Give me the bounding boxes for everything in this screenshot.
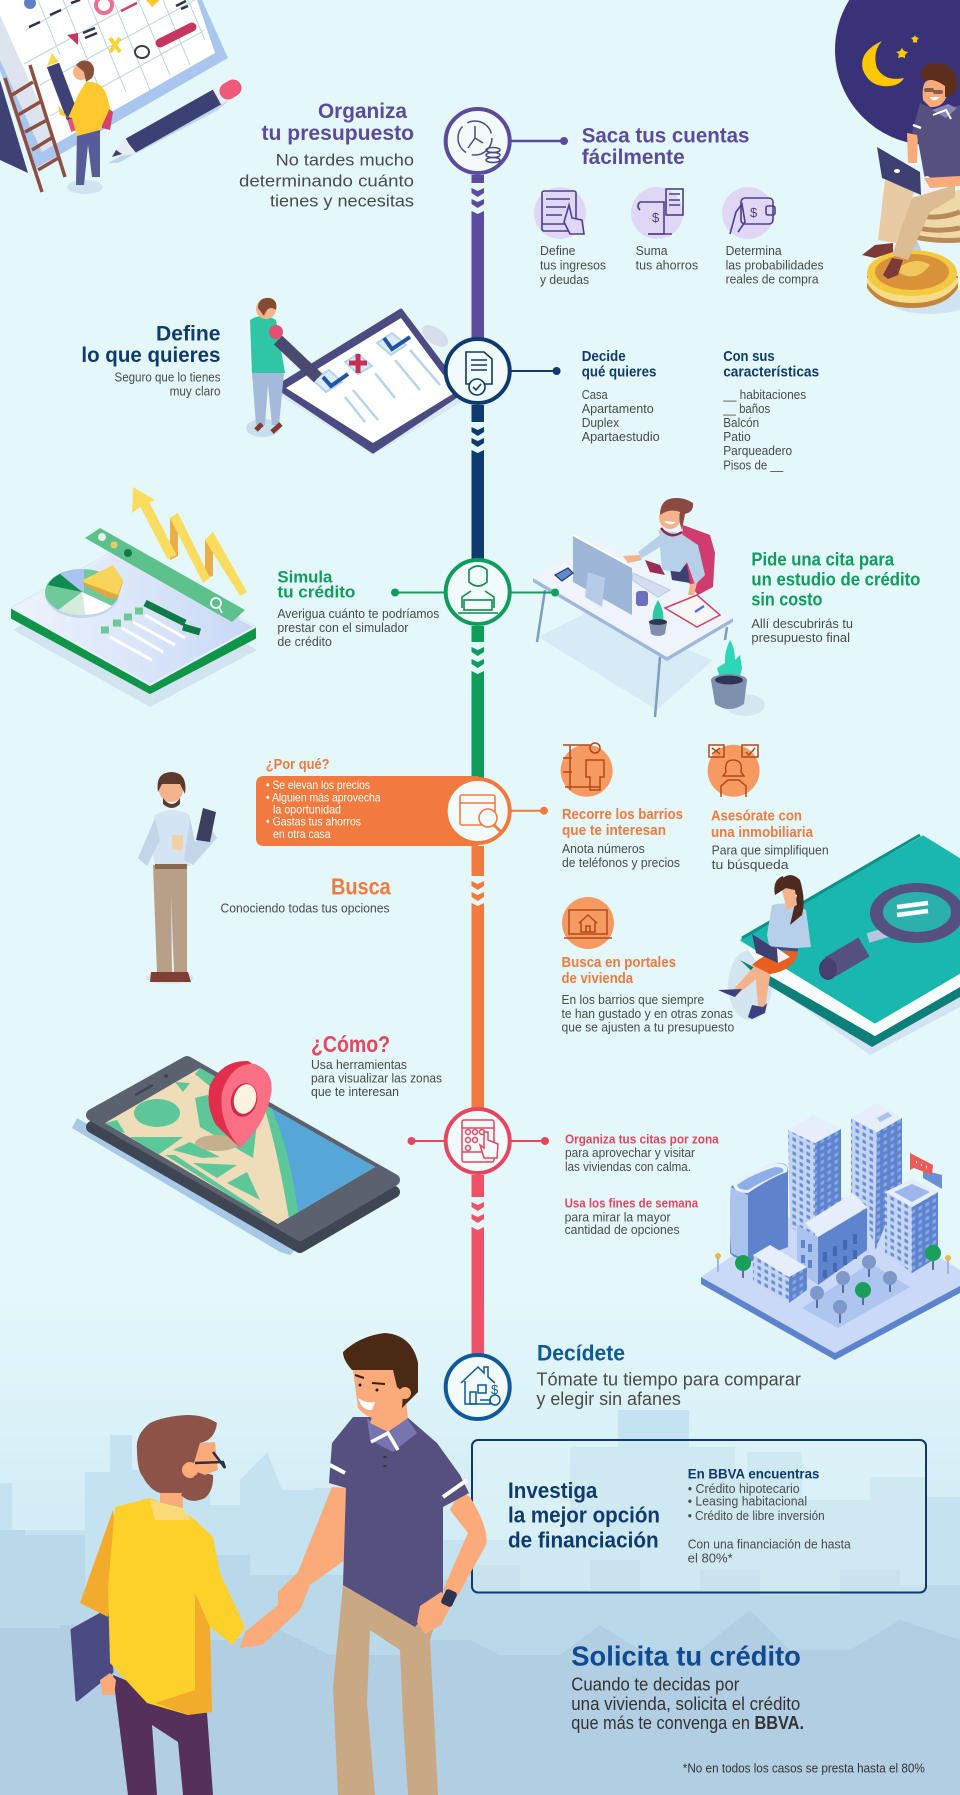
text: organiza tus citas — [565, 1131, 719, 1174]
text: en bbva encuentras: • Crédito hipotecario — [688, 1481, 800, 1496]
heading: decídete: Decídete — [537, 1341, 625, 1366]
text: determina las probabilidades: las probabilidades — [726, 258, 824, 272]
chair — [645, 525, 715, 595]
tall man — [240, 1333, 487, 1795]
text: no tardes mucho: determinando cuánto — [239, 172, 414, 191]
building: round tower — [730, 1163, 788, 1262]
icon: portal de vivienda — [562, 897, 614, 949]
text: para que simplifiquen: Para que simplifiquen — [712, 843, 829, 858]
text: anota números — [562, 841, 680, 870]
heading: decide qué quieres: qué quieres — [582, 364, 656, 381]
heading: recorre los barrios — [562, 806, 683, 839]
building: tower b — [788, 1115, 841, 1240]
icon: inmobiliaria — [708, 745, 760, 797]
heading: pide una cita: Pide una cita para — [751, 549, 895, 569]
text: usa herramientas — [311, 1057, 442, 1099]
text: en los barrios — [562, 992, 734, 1035]
step 1 node: organiza — [446, 109, 568, 173]
heading: organiza tu presupuesto: Organiza — [318, 99, 408, 123]
icon: phone calendar with hand — [462, 1120, 498, 1162]
trees and lamps — [715, 1245, 951, 1323]
illustration: phone with map and pin — [72, 1060, 394, 1255]
heading: organiza tu presupuesto — [262, 99, 414, 145]
cup and small plant — [636, 591, 667, 636]
panel: por qué — [256, 776, 478, 846]
panel: por qué: • Gastas tus ahorros — [266, 815, 361, 829]
building: church — [797, 1193, 867, 1285]
list: características: Pisos de __ — [723, 458, 784, 473]
heading: pide una cita: sin costo — [751, 589, 822, 609]
illustration: credit simulator chart — [12, 487, 257, 707]
heading: simula tu crédito: tu crédito — [277, 582, 355, 602]
heading: busca: Busca — [331, 874, 391, 900]
heading: asesórate — [711, 808, 814, 841]
heading: investiga — [508, 1478, 660, 1553]
list: tipos de vivienda — [582, 387, 660, 444]
heading: define lo que quieres: lo que quieres — [81, 343, 220, 367]
icon: clock and coins — [458, 121, 500, 162]
text: no tardes mucho — [239, 151, 414, 211]
heading: solicita tu crédito: Solicita tu crédito — [571, 1641, 801, 1672]
list: características: __ habitaciones — [722, 387, 807, 402]
text: anota números: de teléfonos y precios — [562, 855, 680, 870]
panel: por qué: la oportunidad — [273, 803, 341, 817]
icon: adviser at desk — [458, 566, 498, 613]
icon: recorre los barrios — [561, 743, 613, 797]
heading: organiza tu presupuesto: tu presupuesto — [262, 121, 414, 145]
potted plant — [711, 640, 765, 716]
step 3 node: simula — [391, 560, 555, 624]
text: determina las probabilidades: Determina — [726, 243, 782, 258]
list: tipos de vivienda: Apartamento — [582, 401, 654, 416]
text: en los barrios: te han gustado y en otras zonas — [562, 1006, 733, 1021]
text: usa los fines de semana: Usa los fines de semana — [565, 1195, 699, 1210]
text: tómate tu tiempo: Tómate tu tiempo para comparar — [536, 1370, 801, 1390]
table rows — [101, 603, 200, 660]
heading: simula tu crédito — [277, 568, 355, 602]
icon: document with check — [466, 352, 492, 395]
heading: busca en portales: de vivienda — [562, 970, 634, 987]
text: determina las probabilidades: reales de compra — [726, 272, 819, 286]
text: cuando te decidas: una vivienda, solicita el crédito — [571, 1694, 800, 1714]
text: por qué: ¿Por qué? — [266, 757, 330, 773]
text: para que simplifiquen — [712, 843, 829, 872]
text: organiza tus citas: las viviendas con calma. — [565, 1159, 691, 1174]
text: seguro que lo tienes: Seguro que lo tienes — [114, 370, 221, 385]
text: allí descubrirás — [751, 616, 853, 645]
text: organiza tus citas: Organiza tus citas por zona — [565, 1131, 719, 1146]
step 4 node: busca — [446, 779, 548, 843]
illustration: man with laptop on coins — [835, 0, 960, 314]
building: tower c — [851, 1103, 902, 1250]
woman — [623, 498, 705, 595]
text: en bbva encuentras: En BBVA encuentras — [688, 1465, 820, 1481]
person with pen — [246, 298, 318, 437]
text: seguro que lo tienes — [114, 370, 221, 399]
heading: busca en portales: Busca en portales — [562, 954, 676, 971]
pie chart — [45, 565, 123, 618]
text: usa los fines de semana — [565, 1195, 699, 1237]
list: características: Patio — [723, 429, 751, 444]
heading: decide qué quieres: Decide — [582, 348, 626, 365]
panel: por qué: • Se elevan los precios — [266, 778, 370, 792]
step 2 node: define — [446, 339, 561, 403]
heading: asesórate: una inmobiliaria — [711, 824, 814, 841]
coin stack — [867, 190, 960, 314]
text: no tardes mucho: tienes y necesitas — [270, 192, 414, 211]
notebook — [665, 595, 720, 627]
man — [862, 63, 960, 279]
text: en bbva encuentras: el 80%* — [688, 1550, 733, 1565]
illustration: woman at desk — [511, 498, 765, 717]
icon: house with keys: $ — [491, 1382, 499, 1397]
heading: recorre los barrios: Recorre los barrios — [562, 806, 683, 823]
arrow zigzag — [132, 487, 247, 596]
text: allí descubrirás: presupuesto final — [751, 630, 850, 645]
text: cuando te decidas — [571, 1675, 804, 1733]
text: determina las probabilidades — [726, 243, 824, 286]
list: tipos de vivienda: Duplex — [582, 415, 620, 430]
woman — [718, 875, 811, 1019]
panel: por qué: en otra casa — [273, 827, 331, 841]
panel: investiga — [472, 1440, 926, 1592]
text: define tus ingresos — [540, 243, 606, 287]
heading: define lo que quieres — [81, 322, 221, 367]
text: conociendo todas: Conociendo todas tus opciones — [220, 900, 390, 916]
monitor — [573, 535, 632, 615]
text: para que simplifiquen: tu búsqueda — [712, 857, 789, 872]
toolbar — [100, 540, 240, 622]
magnifier — [819, 883, 960, 980]
text: anota números: Anota números — [562, 841, 645, 856]
heading: con sus características: características — [723, 364, 819, 381]
pencil — [108, 88, 235, 163]
text: en bbva encuentras: • Leasing habitacional — [688, 1494, 807, 1509]
step 6 node: decídete — [446, 1355, 510, 1419]
icon: receipt and calculator — [638, 189, 683, 234]
list: tipos de vivienda: Casa — [582, 387, 608, 402]
phone — [555, 568, 573, 581]
step 5 node: cómo — [408, 1109, 549, 1173]
text: en bbva encuentras: Con una financiación de hasta — [688, 1537, 851, 1552]
text: organiza tus citas: para aprovechar y visitar — [565, 1145, 696, 1160]
desk top — [533, 539, 733, 661]
text: define tus ingresos: Define — [540, 243, 576, 258]
text: averigua — [277, 606, 440, 649]
text: averigua: Averigua cuánto te podríamos — [277, 606, 440, 621]
footnote: *No en todos los casos se presta hasta el 80% — [683, 1761, 925, 1776]
icon: income list — [542, 191, 584, 234]
text: usa herramientas: para visualizar las zonas — [311, 1070, 442, 1085]
text: define tus ingresos: y deudas — [540, 272, 589, 287]
desk legs — [537, 590, 727, 717]
heading: saca tus cuentas: fácilmente — [582, 145, 685, 169]
list: tipos de vivienda: Apartaestudio — [582, 429, 660, 444]
heading: define lo que quieres: Define — [156, 322, 221, 346]
illustration: handshake between two men — [72, 1333, 487, 1795]
illustration: man with phone and coffee — [138, 772, 217, 984]
icons: budget steps — [534, 187, 775, 239]
list: características: Parqueadero — [723, 443, 792, 458]
text: usa los fines de semana: cantidad de opciones — [565, 1222, 680, 1237]
text: define tus ingresos: tus ingresos — [540, 258, 606, 272]
list: características — [722, 387, 807, 473]
ladder — [5, 65, 65, 192]
illustration: calendar with person — [0, 0, 235, 194]
heading: recorre los barrios: que te interesan — [562, 822, 666, 839]
timeline — [472, 175, 484, 1356]
heading: investiga: la mejor opción — [508, 1502, 660, 1527]
text: usa herramientas: Usa herramientas — [311, 1057, 407, 1072]
heading: decide qué quieres — [582, 348, 656, 381]
text: cuando te decidas: que más te convenga en BBVA. — [571, 1713, 804, 1733]
text: allí descubrirás: Allí descubrirás tu — [751, 616, 853, 631]
icon: wallet and hand: $ — [750, 205, 758, 220]
heading: saca tus cuentas: Saca tus cuentas — [582, 124, 750, 148]
icon: wallet and hand — [730, 198, 775, 234]
text: en bbva encuentras: • Crédito de libre inversión — [688, 1508, 825, 1523]
map pin — [195, 1061, 272, 1151]
text: en los barrios: En los barrios que siempre — [562, 992, 704, 1007]
keyboard — [632, 573, 670, 597]
text: usa los fines de semana: para mirar la mayor — [565, 1209, 671, 1224]
building: small block — [753, 1245, 807, 1303]
heading: asesórate: Asesórate con — [711, 808, 802, 825]
heading: investiga: de financiación — [508, 1528, 659, 1553]
text: seguro que lo tienes: muy claro — [170, 384, 221, 399]
bearded man — [72, 1415, 245, 1795]
list: características: __ baños — [722, 401, 771, 416]
illustration: woman on tablet with magnifier — [718, 835, 960, 1055]
text: usa herramientas: que te interesan — [311, 1084, 399, 1099]
map screen — [105, 1068, 375, 1224]
heading: simula tu crédito: Simula — [277, 568, 333, 586]
text: en bbva encuentras — [688, 1465, 851, 1565]
text: tómate tu tiempo — [536, 1370, 801, 1409]
text: tómate tu tiempo: y elegir sin afanes — [536, 1389, 681, 1409]
heading: pide una cita: un estudio de crédito — [751, 570, 920, 590]
person — [58, 61, 113, 194]
text: suma tus ahorros: tus ahorros — [636, 258, 699, 272]
text: suma tus ahorros — [636, 243, 699, 272]
text: en los barrios: que se ajusten a tu presupuesto — [562, 1020, 734, 1035]
big pencil held by person — [47, 53, 77, 130]
skyline background — [0, 1410, 960, 1795]
heading: investiga: Investiga — [508, 1478, 598, 1503]
list: características: Balcón — [723, 415, 759, 430]
building: tower d — [885, 1179, 938, 1273]
illustration: clipboard with person — [246, 298, 465, 455]
text: no tardes mucho: No tardes mucho — [276, 151, 414, 170]
checklist marks — [313, 333, 440, 422]
text: averigua: de crédito — [277, 634, 332, 649]
text: cuando te decidas: Cuando te decidas por — [571, 1675, 739, 1695]
heading: pide una cita — [751, 549, 920, 609]
heading: cómo: ¿Cómo? — [311, 1031, 390, 1057]
heading: busca en portales — [562, 954, 676, 987]
illustration: isometric city — [701, 1103, 960, 1360]
icon: receipt and calculator: $ — [652, 210, 660, 225]
text: suma tus ahorros: Suma — [636, 243, 668, 258]
icon: browser with magnifier — [460, 795, 501, 832]
heading: con sus características — [723, 348, 819, 381]
moon and stars — [862, 35, 919, 86]
heading: con sus características: Con sus — [723, 348, 775, 365]
calendar marks — [24, 0, 192, 58]
panel: por qué: • Alguien más aprovecha — [266, 790, 381, 804]
text: averigua: prestar con el simulador — [277, 620, 409, 635]
heading: saca tus cuentas — [582, 124, 750, 169]
flag and chat — [910, 1153, 942, 1189]
